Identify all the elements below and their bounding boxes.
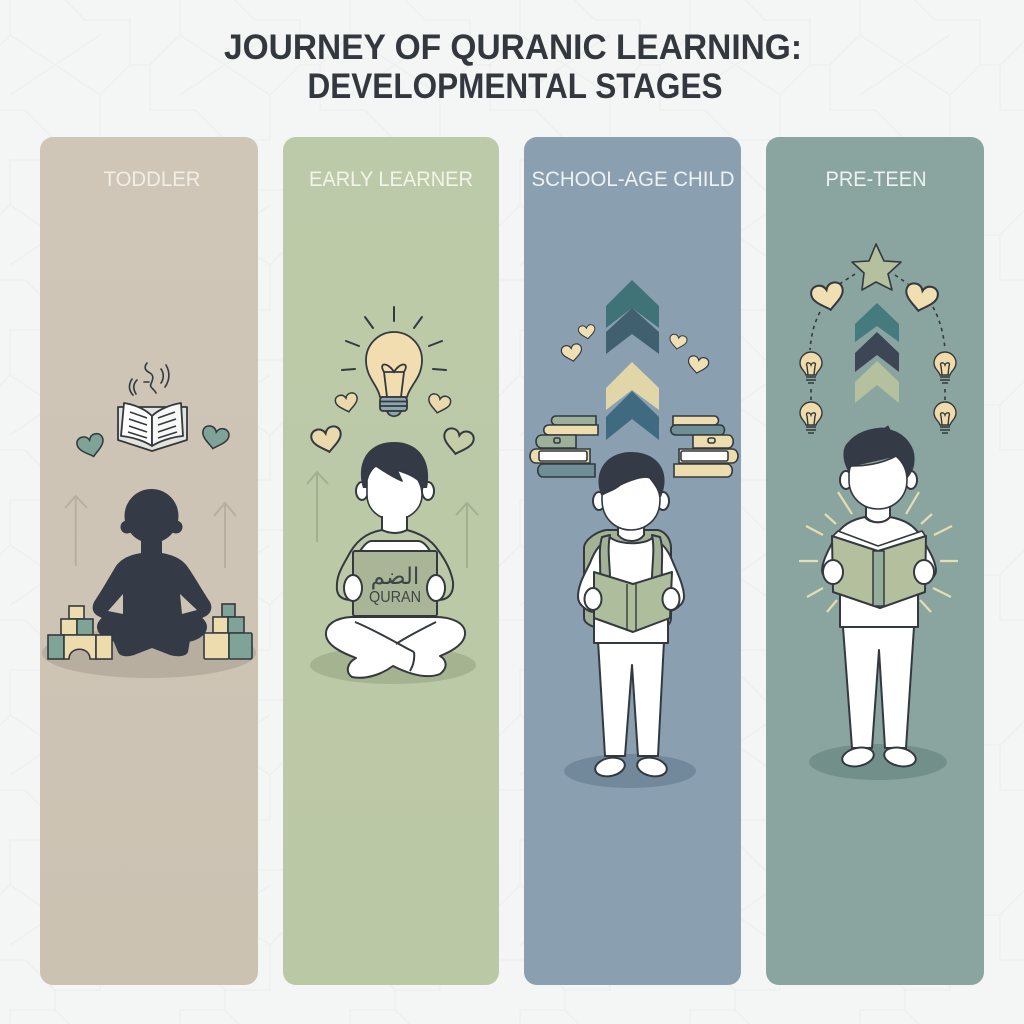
- dashed arc connectors: [810, 274, 945, 401]
- icon: blocks right: [204, 604, 252, 659]
- arrow: growth left: [65, 496, 87, 566]
- chevrons: upward progress: [855, 303, 899, 403]
- text: book cover: [369, 564, 421, 606]
- arrow: growth left: [307, 472, 328, 542]
- ground shadow: [42, 628, 256, 678]
- icon: sound waves: [129, 363, 169, 395]
- icon: heart left: [76, 432, 106, 460]
- arrow: growth right: [214, 503, 236, 568]
- arrow: growth right: [456, 503, 478, 568]
- label: toddler: TODDLER: [104, 168, 200, 191]
- icon: book stack right: [671, 416, 738, 477]
- icon: hearts: [810, 281, 939, 314]
- icon: book stack left: [530, 416, 598, 477]
- ground shadow: [310, 646, 476, 684]
- chevrons: upward progress: [606, 280, 659, 440]
- panel: toddler: [40, 137, 258, 985]
- title: [224, 28, 802, 106]
- label: school-age child: SCHOOL-AGE CHILD: [532, 168, 734, 191]
- figure: standing pre-teen with open book: [822, 426, 936, 769]
- label: pre-teen: PRE-TEEN: [826, 168, 926, 191]
- panel: school-age child: [524, 137, 741, 985]
- icon: light bulb: [342, 307, 446, 416]
- icon: heart right: [200, 425, 230, 451]
- label: early learner: EARLY LEARNER: [309, 168, 473, 191]
- icon: open book: [118, 403, 187, 451]
- ground shadow: [809, 744, 947, 780]
- icon: hearts: [561, 324, 709, 375]
- ground shadow: [564, 754, 696, 788]
- icon: star: [852, 244, 901, 290]
- panel: pre-teen: [766, 137, 984, 985]
- silhouette: toddler: [93, 489, 211, 656]
- figure: standing child with backpack: [578, 452, 684, 779]
- text: book cover: QURAN: [369, 589, 421, 606]
- title: JOURNEY OF QURANIC LEARNING:: [224, 28, 802, 67]
- text: book cover: الضم: [371, 564, 419, 590]
- figure: seated child with Quran: [326, 442, 465, 678]
- icon: glow rays: [799, 492, 958, 612]
- panel: early learner: [283, 137, 499, 985]
- icon: hearts: [310, 392, 475, 457]
- icon: small bulbs: [800, 352, 956, 433]
- title: DEVELOPMENTAL STAGES: [308, 67, 722, 106]
- icon: blocks left: [48, 606, 112, 659]
